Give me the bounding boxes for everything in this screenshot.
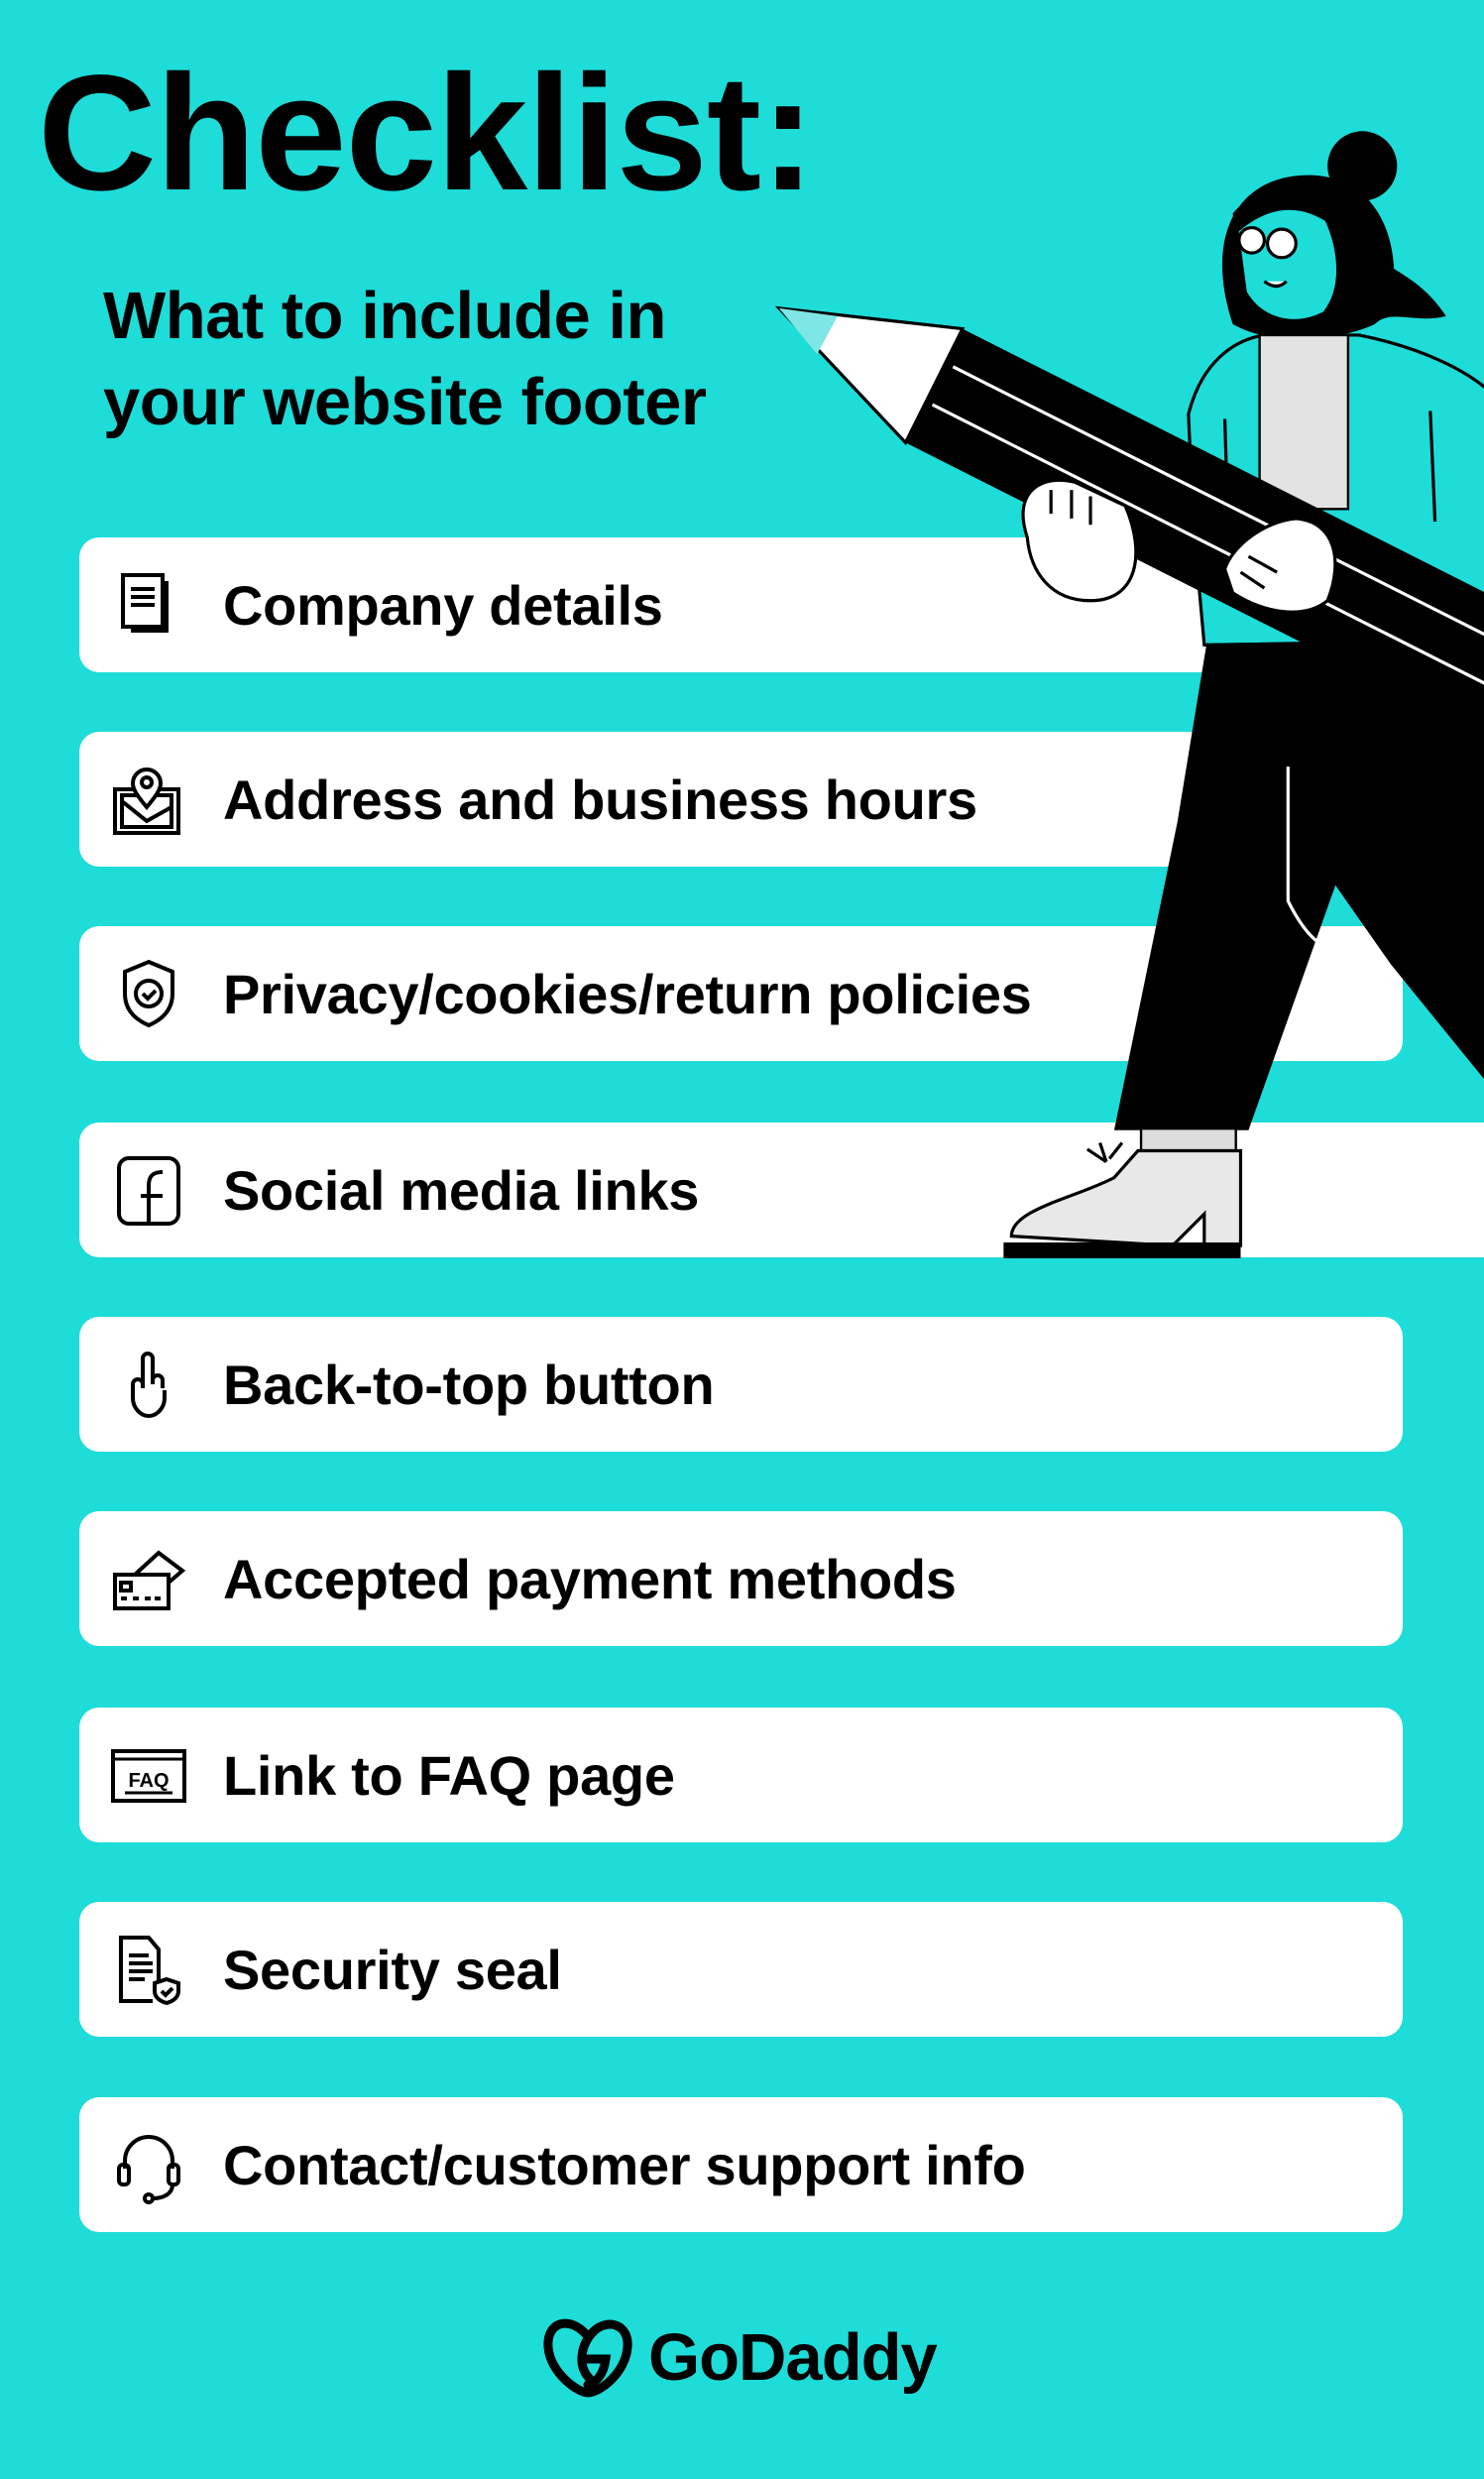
label: Privacy/cookies/return policies xyxy=(223,962,1032,1025)
row: payment xyxy=(79,1511,1403,1646)
row: contact xyxy=(79,2097,1403,2232)
icon: headset xyxy=(117,2135,180,2204)
icon: FAQ: FAQ xyxy=(128,1770,170,1792)
label: Social media links xyxy=(223,1158,699,1222)
icon: documents xyxy=(121,573,169,633)
icon: FAQ xyxy=(111,1749,186,1803)
icon: shield xyxy=(123,960,174,1027)
row: privacy xyxy=(79,926,1403,1061)
icon: facebook xyxy=(117,1156,180,1226)
row: social xyxy=(79,1122,1484,1257)
label: Security seal xyxy=(223,1938,562,2001)
shoe xyxy=(1003,1128,1240,1258)
icon: GoDaddy heart xyxy=(543,2318,632,2398)
jacket xyxy=(1189,335,1484,645)
logo: GoDaddy xyxy=(543,2318,938,2398)
icon: map pin xyxy=(113,767,180,835)
label: Company details xyxy=(223,573,663,637)
illustration: woman with giant pencil xyxy=(775,131,1484,1258)
row: back to top xyxy=(79,1317,1403,1452)
icon: finger xyxy=(131,1352,167,1418)
title: Checklist: xyxy=(38,42,814,225)
label: Contact/customer support info xyxy=(223,2134,1026,2195)
row: security seal xyxy=(79,1902,1403,2037)
pencil xyxy=(779,308,1484,792)
subtitle: What to include in xyxy=(103,279,666,353)
subtitle xyxy=(103,279,706,439)
label: Back-to-top button xyxy=(223,1353,714,1416)
label: Link to FAQ page xyxy=(223,1743,675,1807)
logo: GoDaddy: GoDaddy xyxy=(648,2320,937,2395)
hands xyxy=(1023,480,1335,612)
label: Accepted payment methods xyxy=(223,1547,957,1610)
pants xyxy=(1114,617,1484,1130)
row: faq xyxy=(79,1708,1403,1842)
subtitle: your website footer xyxy=(103,365,706,439)
icon: card xyxy=(113,1550,186,1610)
hair back xyxy=(1222,131,1446,339)
icon: document seal xyxy=(119,1936,180,2005)
row: company details xyxy=(79,537,1403,672)
label: Address and business hours xyxy=(223,767,977,831)
face xyxy=(1233,188,1351,320)
row: address xyxy=(79,732,1403,867)
